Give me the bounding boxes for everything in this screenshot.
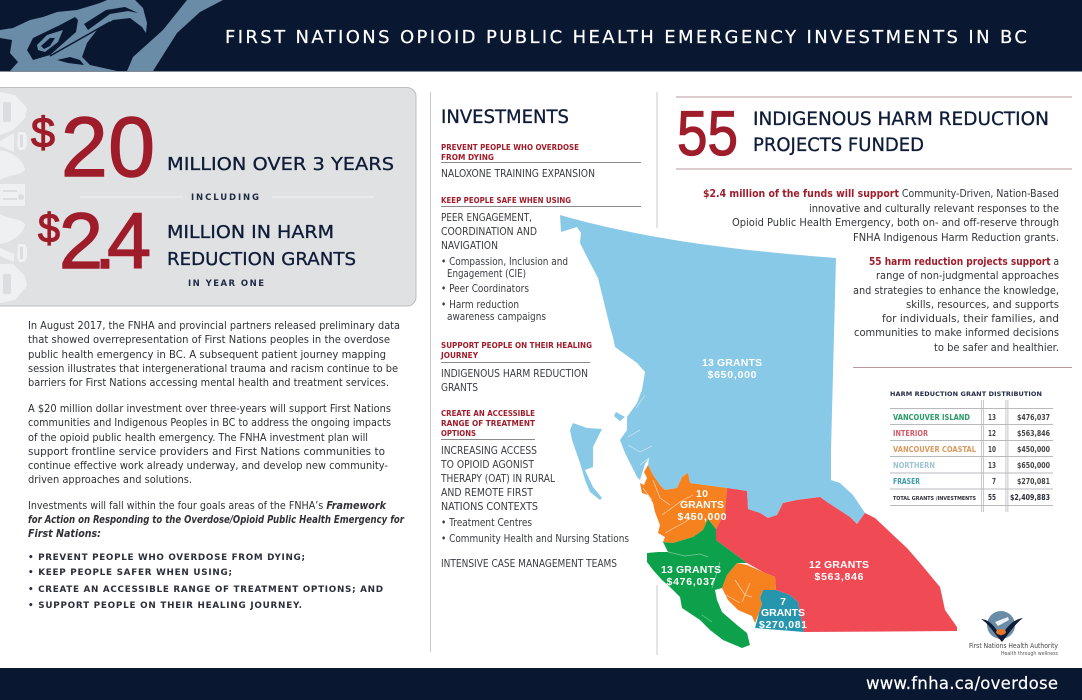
text block: background paragraph: In August 2017, the FNHA and provincial partners released preliminary data	[28, 319, 400, 332]
row: Vancouver Coastal: $450,000	[1017, 445, 1050, 454]
text block: investment paragraph: support frontline service providers and First Nations communities to	[28, 445, 385, 458]
row: Vancouver Coastal: VANCOUVER COASTAL	[893, 445, 976, 454]
label: Interior: 12 GRANTS	[809, 559, 869, 571]
goal: support healing journey: SUPPORT PEOPLE ON THEIR HEALING	[441, 340, 592, 350]
row: Vancouver Island: VANCOUVER ISLAND	[893, 413, 970, 422]
goal: accessible treatment: THERAPY (OAT) IN RURAL	[440, 474, 555, 485]
goal: prevent overdose deaths: NALOXONE TRAINING EXPANSION	[441, 169, 595, 180]
stat: $20 million: 20	[61, 100, 155, 194]
goal: prevent overdose deaths	[441, 142, 641, 180]
logo: First Nations Health Authority: First Nations Health Authority	[969, 642, 1058, 650]
goal: support healing journey: GRANTS	[441, 383, 478, 394]
label: Fraser	[759, 596, 807, 631]
stat: $2.4 million: MILLION IN HARM	[167, 222, 334, 243]
text block: background paragraph: barriers for First Nations accessing mental health and treatment services.	[28, 376, 389, 389]
list: four goals: • PREVENT PEOPLE WHO OVERDOSE FROM DYING;	[28, 553, 305, 563]
region: Northern	[560, 215, 865, 524]
stat: $20 million: $	[31, 109, 55, 157]
row: Northern: $650,000	[1017, 461, 1050, 470]
label: Vancouver Coastal: 10	[696, 488, 708, 500]
footer banner	[0, 668, 1082, 700]
row: Vancouver Island	[893, 413, 1050, 422]
text block: investment paragraph: continue effective work already underway, and develop new community-	[28, 459, 388, 472]
row: Fraser: $270,081	[1017, 477, 1050, 486]
text block: harm reduction approaches: range of non-judgmental approaches	[876, 269, 1059, 282]
row: total: TOTAL GRANTS /INVESTMENTS	[893, 496, 976, 502]
stat: $20 million: MILLION OVER 3 YEARS	[167, 154, 394, 175]
table: harm reduction grant distribution	[890, 390, 1053, 512]
text block: framework paragraph: for Action on Responding to the Overdose/Opioid Public Health Emergency for	[28, 513, 404, 526]
goal: accessible treatment: NATIONS CONTEXTS	[441, 502, 538, 513]
goal: support healing journey	[440, 340, 592, 394]
text block: framework paragraph	[28, 499, 404, 540]
text block: funding description: FNHA Indigenous Harm Reduction grants.	[853, 231, 1059, 244]
goal: keep people safe: COORDINATION AND	[441, 227, 537, 238]
table title: HARM REDUCTION GRANT DISTRIBUTION	[890, 390, 1042, 398]
goal: keep people safe	[441, 195, 641, 323]
stat: $2.4 million: 2.4	[59, 196, 151, 285]
text block: framework paragraph: Investments will fall within the four goals areas of the FNHA’s Framework	[28, 499, 387, 512]
divider label: including: INCLUDING	[191, 193, 259, 203]
label: Northern: $650,000	[708, 369, 757, 381]
panel: projects funded heading: INDIGENOUS HARM REDUCTION	[753, 108, 1049, 130]
stat: $20 million	[31, 100, 394, 194]
goal: accessible treatment: TO OPIOID AGONIST	[440, 460, 535, 471]
row: Interior: INTERIOR	[893, 429, 928, 438]
goal: accessible treatment: INTENSIVE CASE MANAGEMENT TEAMS	[441, 559, 617, 570]
list: four goals: • SUPPORT PEOPLE ON THEIR HEALING JOURNEY.	[28, 601, 302, 611]
row: Fraser: 7	[992, 477, 996, 486]
row: Vancouver Coastal	[893, 445, 1050, 454]
goal: prevent overdose deaths: FROM DYING	[441, 152, 494, 162]
logo: First Nations Health Authority: Health through wellness	[1001, 651, 1058, 657]
text block: background paragraph: that showed overrepresentation of First Nations peoples in the overdose	[28, 333, 390, 346]
text block: harm reduction approaches: skills, resources, and supports	[906, 298, 1059, 311]
text block: harm reduction approaches: to be safer and healthier.	[934, 341, 1059, 354]
label: Vancouver Coastal	[678, 488, 727, 523]
text block: investment paragraph: communities and Indigenous Peoples in BC to address the ongoing impacts	[28, 416, 391, 429]
goal: keep people safe: • Compassion, Inclusion and	[441, 257, 568, 268]
panel: projects funded heading: PROJECTS FUNDED	[753, 134, 924, 156]
header banner	[0, 0, 1082, 72]
heading: investments: INVESTMENTS	[441, 106, 569, 128]
goal: keep people safe: awareness campaigns	[447, 312, 546, 323]
label: Vancouver Coastal: GRANTS	[680, 499, 724, 511]
row: Vancouver Island: $476,037	[1017, 413, 1050, 422]
icon: raven artwork	[0, 0, 223, 71]
goal: support healing journey: JOURNEY	[440, 350, 479, 360]
stat: $2.4 million: $	[38, 205, 60, 251]
goal: accessible treatment: OPTIONS	[441, 428, 476, 438]
panel: projects funded heading	[676, 96, 1072, 170]
text block: harm reduction approaches	[853, 255, 1072, 368]
label: Vancouver Island: $476,037	[666, 576, 716, 588]
label: Vancouver Island: 13 GRANTS	[661, 564, 721, 576]
region: Interior	[716, 488, 957, 632]
panel: funding summary	[0, 88, 416, 306]
goal: keep people safe: PEER ENGAGEMENT,	[441, 213, 532, 224]
text block: funding description: $2.4 million of the funds will support Community-Driven, Nation-Based	[703, 187, 1059, 200]
label: Fraser: GRANTS	[761, 607, 805, 619]
label: Northern: 13 GRANTS	[702, 357, 762, 369]
label: Fraser: 7	[780, 596, 786, 608]
label: Vancouver Coastal: $450,000	[678, 511, 727, 523]
text block: investment paragraph: driven approaches and solutions.	[28, 473, 192, 486]
goal: accessible treatment: • Community Health and Nursing Stations	[441, 534, 629, 545]
text block: investment paragraph: of the opioid public health emergency. The FNHA investment plan will	[28, 431, 368, 444]
footer url: www.fnha.ca/overdose	[866, 674, 1058, 693]
decorative formline pattern	[0, 92, 27, 303]
row: Fraser: FRASER	[893, 477, 920, 486]
region: Vancouver Island and coast	[647, 519, 750, 648]
row: total: 55	[988, 493, 996, 502]
text block: investment paragraph: A $20 million dollar investment over three-years will support First Nations	[28, 402, 391, 415]
panel: investments	[440, 106, 641, 570]
text block: framework paragraph: First Nations:	[28, 527, 101, 540]
row: Vancouver Coastal: 10	[988, 445, 996, 454]
region: Vancouver Coastal south	[722, 563, 776, 623]
text block: investment paragraph	[28, 402, 391, 486]
goal: support healing journey: INDIGENOUS HARM REDUCTION	[441, 369, 588, 380]
goal: keep people safe: Engagement (CIE)	[447, 269, 526, 280]
logo: First Nations Health Authority	[969, 611, 1058, 657]
region: Fraser	[755, 590, 804, 632]
row: total	[893, 493, 1050, 502]
panel: projects funded heading: 55	[677, 99, 738, 169]
row: Fraser	[893, 477, 1050, 486]
label: Interior	[809, 559, 869, 583]
goal: accessible treatment	[440, 408, 629, 570]
text block: funding description: innovative and culturally relevant responses to the	[809, 202, 1059, 215]
list: four goals: • KEEP PEOPLE SAFER WHEN USING;	[28, 568, 232, 578]
text block: background paragraph: session illustrates that intergenerational trauma and racism continue to be	[28, 362, 398, 375]
row: Northern: 13	[988, 461, 996, 470]
text block: funding description	[703, 187, 1059, 244]
goal: keep people safe: • Peer Coordinators	[441, 284, 529, 295]
label: Vancouver Island	[661, 564, 721, 588]
goal: keep people safe: NAVIGATION	[441, 241, 498, 252]
text block: background paragraph	[28, 319, 400, 389]
stat: $2.4 million	[38, 196, 356, 289]
goal: prevent overdose deaths: PREVENT PEOPLE WHO OVERDOSE	[441, 142, 579, 152]
map: British Columbia grant regions	[560, 215, 957, 648]
stat: $2.4 million: IN YEAR ONE	[188, 279, 264, 289]
goal: accessible treatment: RANGE OF TREATMENT	[441, 418, 535, 428]
region: Vancouver Coastal north	[640, 465, 727, 543]
label: Fraser: $270,081	[759, 619, 807, 631]
goal: accessible treatment: • Treatment Centres	[441, 518, 532, 529]
list: four goals	[28, 553, 383, 611]
text block: background paragraph: public health emergency in BC. A subsequent patient journey mapping	[28, 348, 386, 361]
goal: keep people safe: • Harm reduction	[441, 300, 519, 311]
goal: keep people safe: KEEP PEOPLE SAFE WHEN USING	[441, 195, 571, 205]
text block: harm reduction approaches: and strategies to enhance the knowledge,	[853, 284, 1059, 297]
row: total: $2,409,883	[1010, 493, 1050, 502]
stat: $2.4 million: REDUCTION GRANTS	[167, 249, 356, 270]
row: Vancouver Island: 13	[988, 413, 996, 422]
goal: accessible treatment: CREATE AN ACCESSIBLE	[441, 408, 535, 418]
text block: harm reduction approaches: for individuals, their families, and	[882, 312, 1059, 325]
row: Interior: 12	[988, 429, 996, 438]
title: FIRST NATIONS OPIOID PUBLIC HEALTH EMERGENCY INVESTMENTS IN BC	[225, 27, 1027, 48]
row: Interior	[893, 429, 1050, 438]
row: Northern	[893, 461, 1050, 470]
label: Interior: $563,846	[814, 571, 864, 583]
label: Northern	[702, 357, 762, 381]
row: Northern: NORTHERN	[893, 461, 935, 470]
goal: accessible treatment: AND REMOTE FIRST	[441, 488, 534, 499]
list: four goals: • CREATE AN ACCESSIBLE RANGE OF TREATMENT OPTIONS; AND	[28, 585, 383, 595]
goal: accessible treatment: INCREASING ACCESS	[441, 446, 537, 457]
row: Interior: $563,846	[1017, 429, 1050, 438]
text block: harm reduction approaches: communities to make informed decisions	[854, 326, 1059, 339]
